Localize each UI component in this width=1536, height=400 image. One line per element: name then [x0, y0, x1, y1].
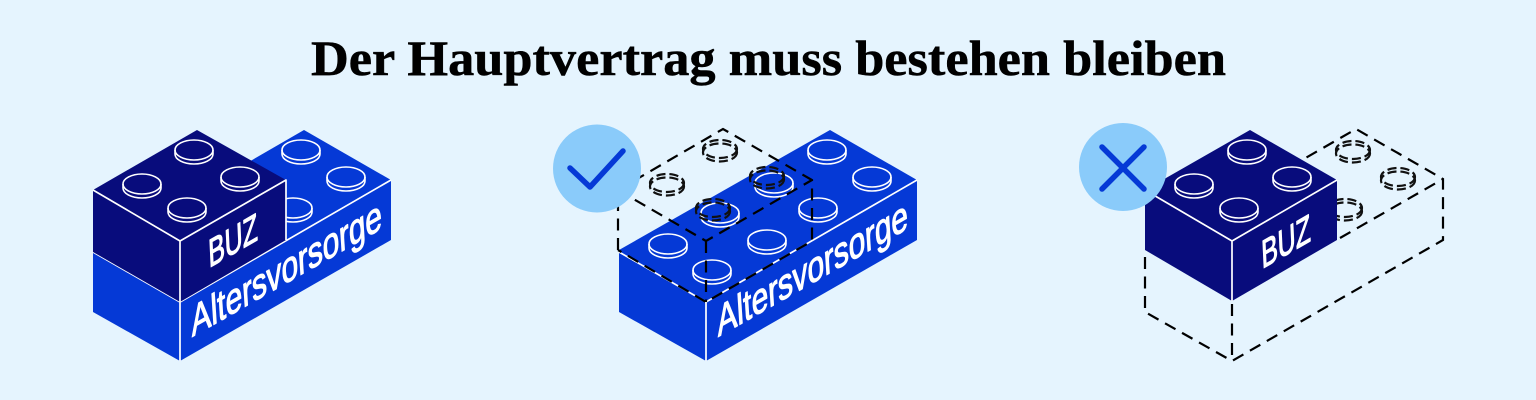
brick: Altersvorsorge — [619, 130, 917, 361]
brick outline: removed BUZ — [618, 129, 812, 302]
icon: cross badge — [1079, 123, 1167, 211]
brick: BUZ — [93, 130, 286, 302]
brick: BUZ — [1145, 130, 1337, 301]
label: BUZ: BUZ — [1260, 206, 1312, 278]
panel: both bricks stacked — [93, 130, 391, 361]
panel: correct, Altersvorsorge stays — [553, 124, 917, 361]
brick outline: removed Altersvorsorge — [1145, 129, 1443, 361]
brick: Altersvorsorge — [93, 130, 391, 361]
label: BUZ: BUZ — [207, 205, 259, 277]
label: Altersvorsorge: Altersvorsorge — [716, 191, 909, 347]
label: Altersvorsorge: Altersvorsorge — [190, 191, 383, 347]
panel: wrong, BUZ alone — [1079, 123, 1443, 361]
icon: check badge — [553, 124, 641, 212]
title: Der Hauptvertrag muss bestehen bleiben — [311, 30, 1226, 86]
